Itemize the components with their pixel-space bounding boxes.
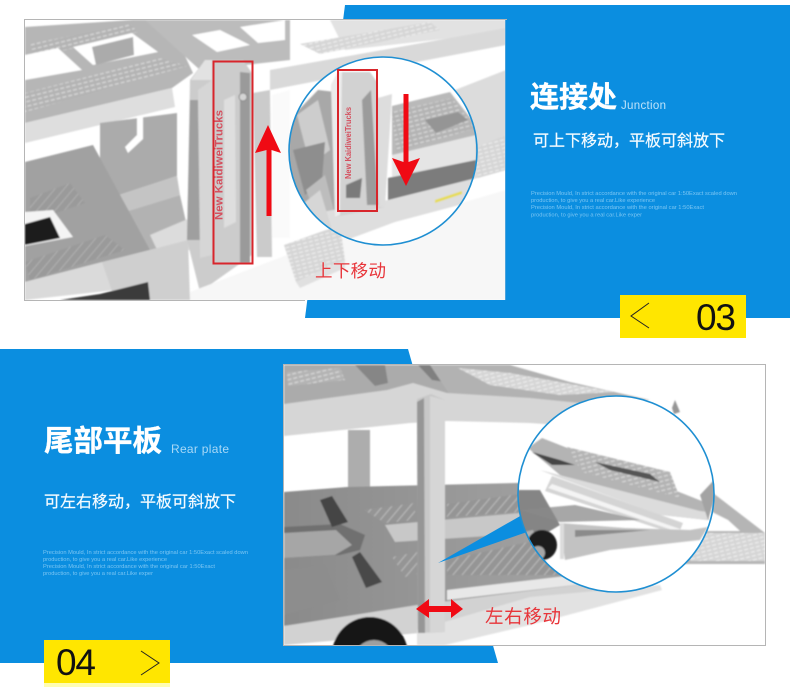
fine print: rear plate: Precision Mould, In strict accordance with the original car 1:50Exact scaled down (43, 550, 248, 556)
caption: left and right movement: 左右移动 (485, 606, 561, 627)
panel: junction product photo (25, 20, 507, 300)
arrow: down (392, 94, 420, 186)
badge: 03: 03 (696, 297, 736, 338)
fine print: junction (531, 191, 737, 218)
fine print: junction: production, to give you a real car.Like experience (531, 198, 655, 204)
photo border (24, 20, 507, 300)
heading: rear plate: 尾部平板 (44, 425, 162, 458)
callout pointer wedge (438, 515, 527, 563)
callout: rear plate magnified circle (510, 396, 714, 592)
fine print: junction: Precision Mould, In strict accordance with the original car 1:50Exact scaled down (531, 191, 737, 197)
heading subtitle: Rear plate: Rear plate (171, 442, 229, 456)
badge: 04: 04 (56, 642, 96, 683)
fine print: rear plate: Precision Mould, In strict accordance with the original car 1:50Exact (43, 564, 215, 570)
arrow: up (255, 125, 281, 216)
panel: rear plate blue background (0, 349, 498, 663)
brand label: magnified latch: New KaidiweiTrucks (344, 106, 353, 179)
callout: junction magnified circle (289, 57, 480, 260)
arrow: left and right (416, 599, 463, 618)
badge: 03 (620, 295, 746, 338)
fine print: rear plate (43, 550, 248, 577)
heading subtitle: Junction: Junction (621, 100, 666, 112)
red highlight box: magnified latch (338, 70, 377, 211)
photo border (284, 364, 766, 646)
heading: junction: 连接处 (530, 81, 617, 114)
fine print: junction: production, to give you a real car.Like exper (531, 212, 642, 218)
fine print: rear plate: production, to give you a real car.Like exper (43, 571, 153, 577)
red highlight box: left latch (214, 62, 252, 264)
description: rear plate: 可左右移动，平板可斜放下 (44, 493, 236, 511)
badge: 04 (44, 640, 170, 687)
fine print: junction: Precision Mould, In strict accordance with the original car 1:50Exact (531, 205, 704, 211)
fine print: rear plate: production, to give you a real car.Like experience (43, 557, 167, 563)
description: junction: 可上下移动，平板可斜放下 (533, 132, 725, 150)
caption: up and down movement: 上下移动 (315, 261, 386, 281)
panel: rear plate product photo (284, 365, 765, 645)
panel: junction blue background (305, 5, 790, 318)
brand label: left latch: New KaidiweiTrucks (214, 110, 226, 220)
